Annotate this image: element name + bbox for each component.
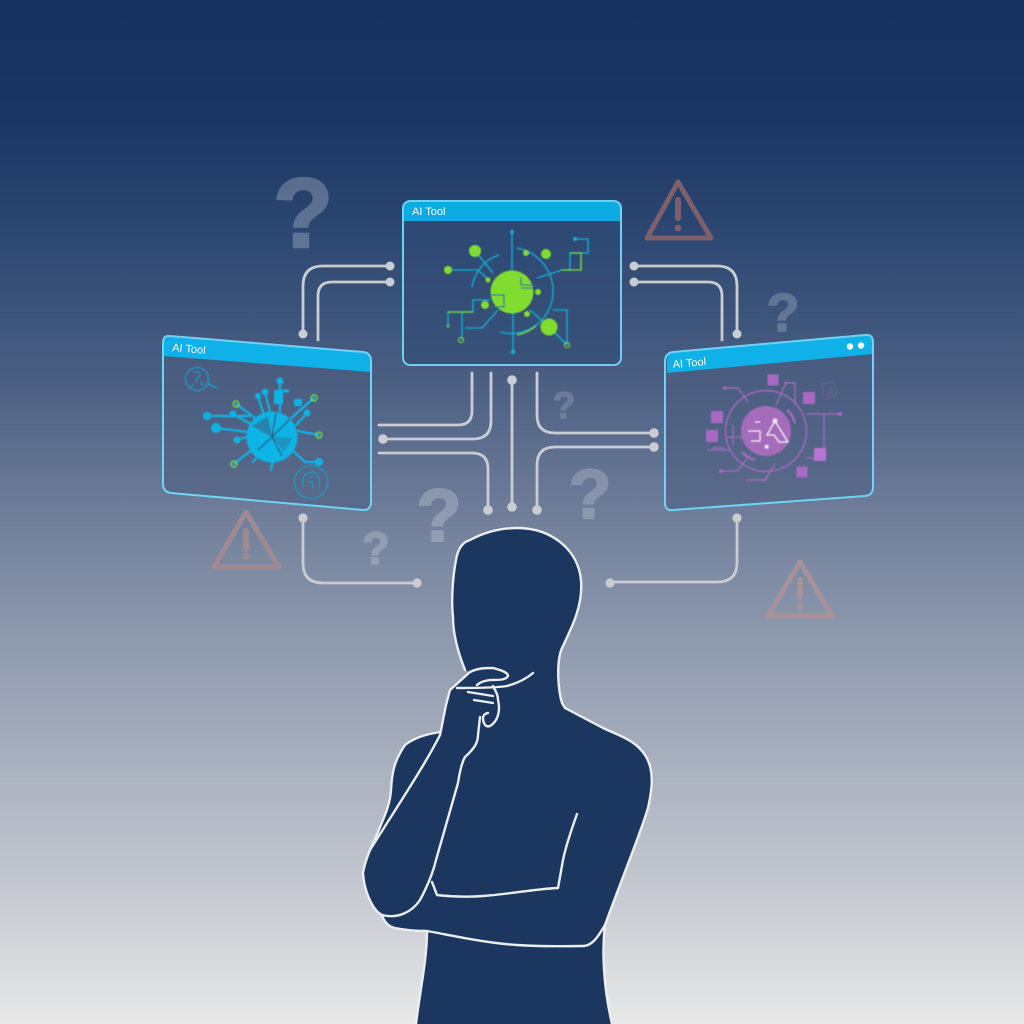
question mark: upper right: ? bbox=[766, 283, 800, 343]
warning icon: lower left bbox=[214, 512, 279, 567]
window controls bbox=[847, 342, 864, 350]
outline: left torso bbox=[416, 931, 427, 1024]
outline: head and right side bbox=[452, 528, 652, 1024]
panel header bbox=[163, 336, 371, 372]
hand detail lines bbox=[457, 673, 533, 726]
question mark: small lower left: ? bbox=[362, 523, 390, 574]
panel title: AI Tool bbox=[672, 356, 707, 371]
connector: bottom left bbox=[298, 513, 422, 588]
outline: upper arm bbox=[363, 717, 480, 916]
connector: bottom right bbox=[605, 513, 742, 588]
connectors: top left bbox=[298, 262, 394, 340]
warning icon: top right bbox=[647, 182, 711, 238]
panel: left AI tool window bbox=[163, 336, 371, 510]
connectors: central junction bbox=[378, 373, 659, 515]
chest and waist lines bbox=[432, 814, 577, 897]
figure: thinking person silhouette bbox=[363, 528, 652, 1024]
network graphic: blue pie bbox=[186, 368, 328, 498]
panel: centre AI tool window bbox=[403, 201, 621, 365]
panel title: AI Tool bbox=[412, 206, 445, 218]
outline: folded arm bbox=[382, 915, 605, 946]
warning icon: lower right bbox=[768, 562, 832, 616]
connectors: top right bbox=[630, 262, 742, 340]
panel: right AI tool window bbox=[665, 335, 873, 510]
question mark: large top left: ? bbox=[273, 158, 333, 268]
question mark: medium left of head: ? bbox=[416, 474, 462, 557]
icon: magnifier bbox=[186, 368, 218, 390]
panel title: AI Tool bbox=[172, 342, 206, 357]
network graphic: green bbox=[444, 230, 588, 354]
outline: forearm inner bbox=[370, 668, 508, 850]
panel header bbox=[667, 335, 873, 373]
network graphic: purple bbox=[706, 374, 842, 482]
icon: small sketch glyph bbox=[822, 382, 836, 399]
question mark: small centre right: ? bbox=[553, 385, 575, 426]
icon: circular badge bbox=[294, 466, 328, 498]
panel header bbox=[403, 201, 621, 221]
question mark: medium right of centre: ? bbox=[569, 455, 611, 533]
